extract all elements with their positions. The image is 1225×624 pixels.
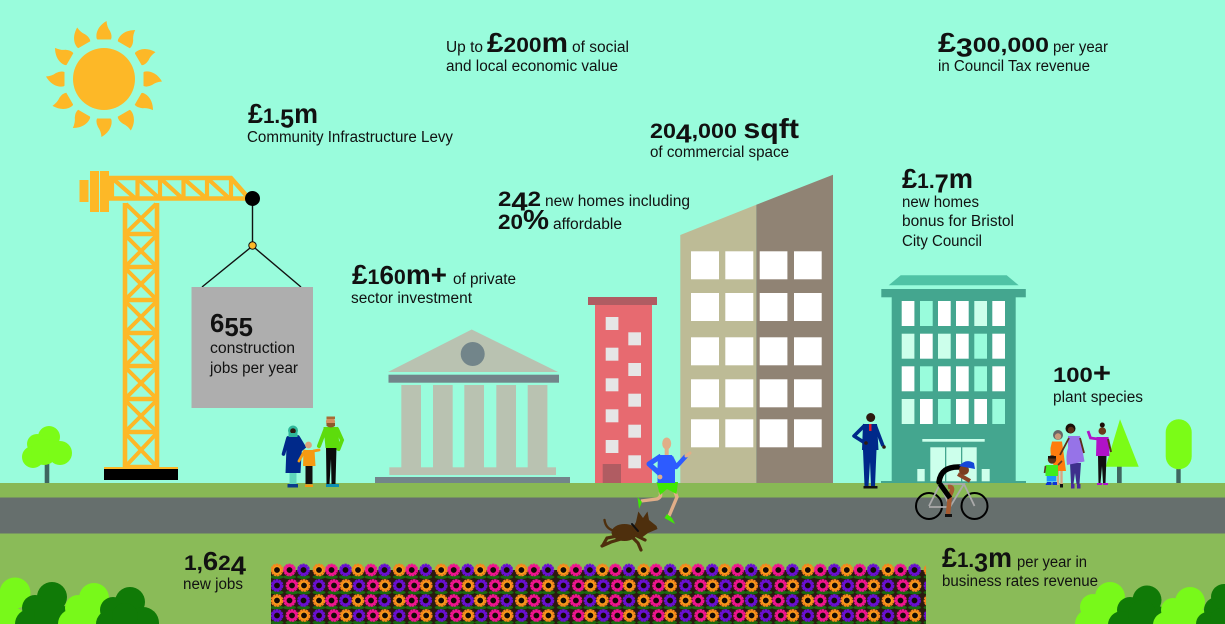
stat: new homes and affordable: 2	[498, 187, 511, 211]
crane mast	[123, 203, 159, 468]
crane base	[104, 467, 178, 480]
stat: new homes bonus: bonus for Bristol	[902, 213, 1014, 230]
stat: commercial space	[650, 113, 799, 161]
stat: business rates revenue: 3	[974, 548, 988, 578]
dog	[602, 512, 658, 550]
flower bed	[270, 565, 1002, 624]
stat: new homes and affordable: new homes including	[545, 193, 690, 210]
stat: business rates revenue: business rates revenue	[942, 573, 1098, 590]
runner	[638, 438, 690, 524]
man in green	[319, 416, 342, 487]
stat: new homes bonus: new homes	[902, 194, 979, 211]
stat: social and local economic value: Up to	[446, 39, 483, 56]
left tree	[22, 426, 72, 483]
stat: plant species: 100+	[1053, 357, 1111, 388]
stat: business rates revenue: m	[988, 542, 1012, 573]
stat: new jobs: new jobs	[183, 576, 243, 593]
crane jib	[110, 178, 249, 200]
bank building	[375, 330, 570, 483]
stat: construction jobs: construction	[210, 340, 295, 357]
people: woman, child and man	[284, 416, 342, 488]
stat: council tax revenue: per year	[1053, 39, 1108, 56]
family group	[1044, 422, 1111, 488]
stat: private sector investment: sector investment	[351, 290, 473, 307]
red tower block	[588, 297, 657, 483]
rounded tree	[1166, 419, 1192, 483]
stat: council tax revenue: in Council Tax revenue	[938, 58, 1090, 75]
stat: social and local economic value: and local economic value	[446, 58, 618, 75]
crane hook and cables	[202, 191, 301, 287]
stat: social and local economic value	[446, 27, 629, 75]
businessman	[854, 413, 886, 488]
stat: council tax revenue: 00,000	[973, 33, 1049, 57]
green office building	[881, 275, 1026, 483]
stat: new homes bonus: m	[949, 163, 973, 194]
stat: construction jobs: jobs per year	[209, 360, 298, 377]
lawn	[0, 534, 1225, 624]
pregnant woman	[1060, 424, 1084, 488]
stat: new homes and affordable: 2	[528, 187, 541, 211]
stat: commercial space: ,000	[692, 119, 743, 143]
stat: business rates revenue: £1.	[942, 542, 975, 573]
stat: construction jobs: 6	[210, 308, 224, 338]
stat: council tax revenue: £	[938, 27, 954, 58]
woman in hijab	[284, 426, 304, 488]
left bushes	[0, 578, 159, 624]
stat: private sector investment: of private	[453, 271, 516, 288]
child in green	[1044, 455, 1062, 485]
stat: business rates revenue	[942, 542, 1098, 590]
cyclist	[916, 461, 988, 519]
stat: community infrastructure levy: £1.	[248, 98, 281, 129]
stat: new jobs: 4	[231, 550, 247, 580]
tall commercial building	[680, 175, 833, 483]
hanging load panel	[192, 287, 313, 408]
stat: construction jobs: 55	[224, 312, 253, 342]
woman waving	[1088, 422, 1111, 485]
stat: business rates revenue: per year in	[1017, 554, 1087, 571]
stat: commercial space: sqft	[743, 113, 795, 144]
stat: new homes bonus	[902, 163, 1014, 250]
stat: construction jobs	[209, 308, 298, 377]
stat: private sector investment: £160m+	[352, 259, 447, 290]
stat: new homes and affordable: 20%	[498, 204, 549, 235]
right bushes	[1075, 582, 1225, 624]
stat: new homes bonus: City Council	[902, 233, 982, 250]
road	[0, 498, 1225, 534]
stat: private sector investment	[351, 259, 516, 307]
stat: new homes and affordable	[498, 186, 690, 235]
stat: commercial space: 4	[676, 118, 692, 148]
stat: council tax revenue	[938, 27, 1108, 75]
stat: new homes bonus: £1.	[902, 163, 935, 194]
stat: community infrastructure levy: Community Infrastructure Levy	[247, 129, 453, 146]
triangular tree	[1106, 419, 1139, 483]
stat: social and local economic value: £200m	[487, 27, 568, 58]
stat: new jobs: 1,62	[184, 546, 230, 576]
stat: community infrastructure levy: m	[294, 98, 318, 129]
stat: new homes and affordable: 4	[511, 186, 528, 216]
stat: plant species: plant species	[1053, 389, 1143, 406]
stat: commercial space: 20	[650, 119, 676, 143]
crane	[80, 171, 301, 480]
stat: community infrastructure levy: 5	[280, 104, 294, 134]
grandmother	[1050, 430, 1066, 488]
child in orange	[299, 442, 319, 487]
stat: council tax revenue: 3	[956, 32, 973, 62]
stat: new homes and affordable: affordable	[553, 216, 622, 233]
stat: new jobs	[183, 546, 247, 593]
stat: commercial space: of commercial space	[650, 144, 789, 161]
stat: plant species	[1053, 357, 1143, 406]
stat: community infrastructure levy	[247, 98, 453, 146]
stat: social and local economic value: of social	[572, 39, 629, 56]
ground strip	[0, 483, 1225, 498]
stat: new homes bonus: 7	[935, 168, 949, 198]
crane counterweights	[80, 171, 109, 212]
icon: sun	[46, 21, 162, 137]
